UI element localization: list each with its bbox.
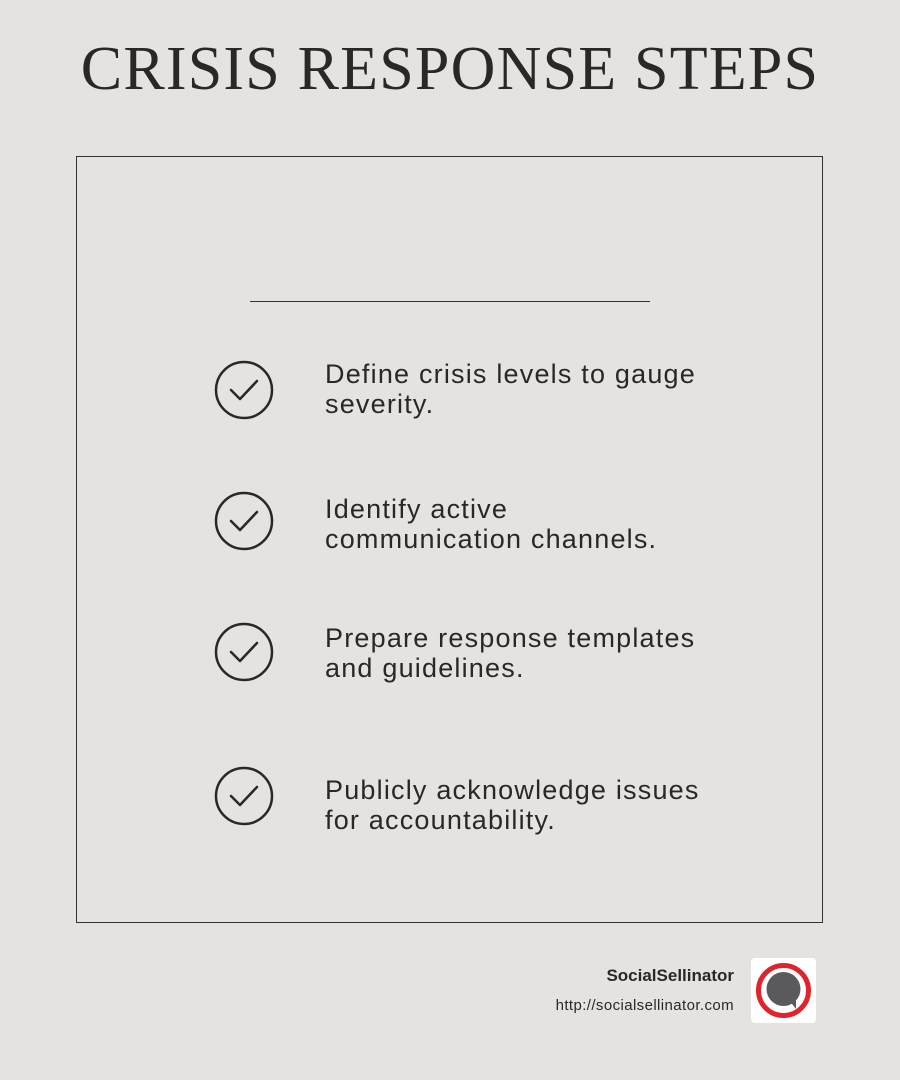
brand name: SocialSellinator [606,966,734,985]
step 2: communication channels. [325,524,657,554]
icon: check circle [214,622,274,682]
icon: check circle [214,492,274,550]
step 2: Identify active [325,494,508,524]
step 3: Prepare response templates [325,623,695,653]
step 1: severity. [325,389,434,419]
icon: check circle [214,360,274,420]
icon: logo [751,958,816,1023]
step 1: Define crisis levels to gauge [325,359,696,389]
icon: check circle [214,766,274,826]
step 4: Publicly acknowledge issues [325,775,700,805]
step 1 [214,359,696,420]
brand url: http://socialsellinator.com [556,997,734,1014]
step 2 [214,492,657,554]
title: CRISIS RESPONSE STEPS [81,35,819,103]
step 3: and guidelines. [325,653,525,683]
panel: steps [76,156,823,923]
step 3 [214,622,695,683]
step 4 [214,766,700,835]
step 4: for accountability. [325,805,556,835]
